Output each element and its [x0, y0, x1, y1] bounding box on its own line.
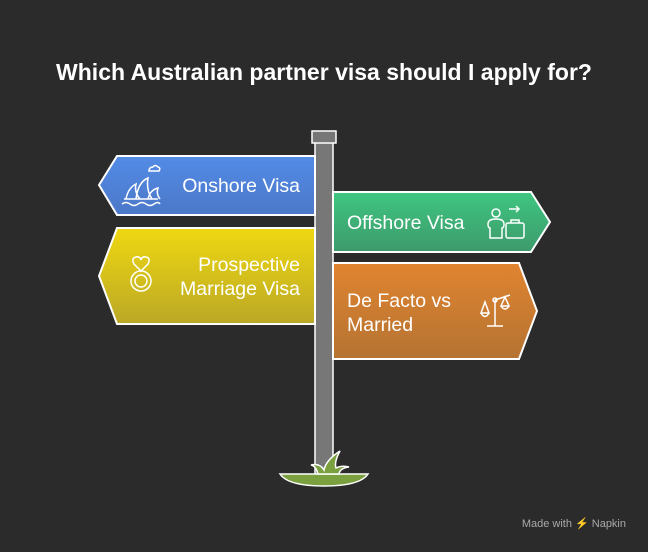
sign: prospective marriage visa — [99, 228, 315, 324]
sign: de facto vs married: De Facto vs — [347, 290, 451, 312]
title: Which Australian partner visa should I apply for? — [56, 59, 592, 85]
grass — [280, 451, 368, 486]
text: Onshore Visa — [182, 175, 300, 197]
sign: offshore visa: Offshore Visa — [347, 212, 465, 234]
sign: prospective marriage visa: Prospective — [198, 254, 300, 276]
icon: traveler — [488, 206, 524, 238]
sign: onshore visa — [99, 156, 315, 215]
sign: de facto vs married: Married — [347, 314, 413, 336]
sign: offshore visa — [333, 192, 550, 252]
icon: scales — [481, 295, 510, 326]
sign: de facto vs married — [333, 263, 537, 359]
icon: opera house — [122, 166, 160, 206]
icon: ring — [131, 257, 151, 291]
footer: made with napkin: Made with ⚡ Napkin — [522, 517, 626, 530]
pole — [312, 131, 336, 474]
sign: prospective marriage visa: Marriage Visa — [180, 278, 300, 300]
